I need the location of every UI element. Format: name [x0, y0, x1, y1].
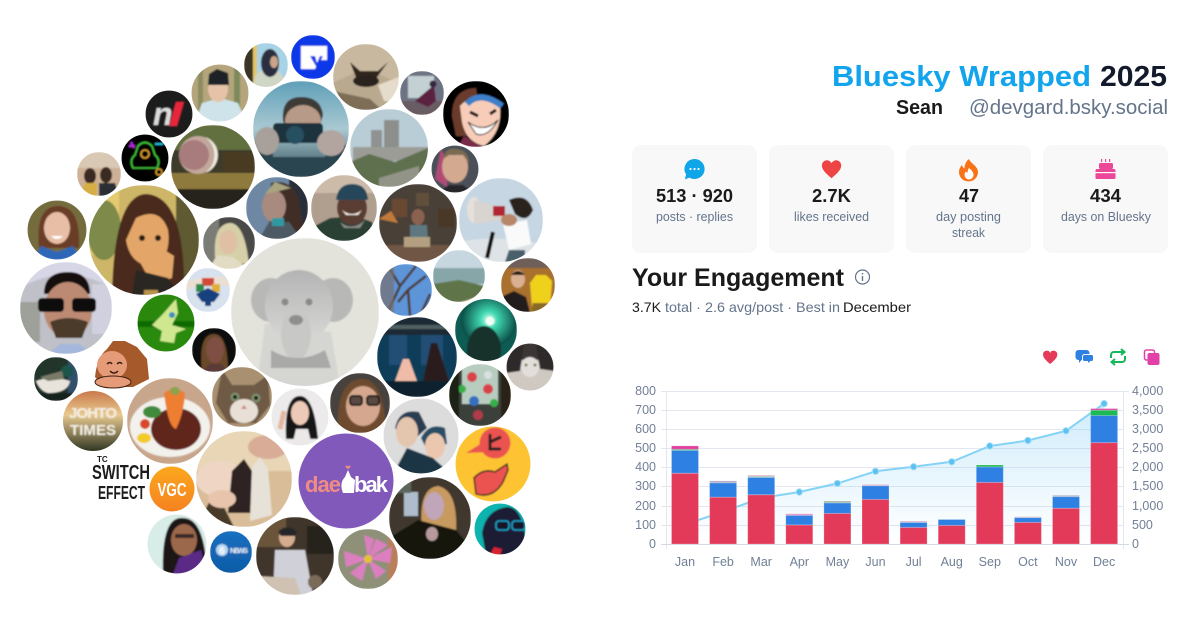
- month labels: Jun: [865, 555, 886, 569]
- avatar: dark blue period drama: [377, 317, 457, 397]
- legend: reposts: [1111, 349, 1125, 365]
- heading: Your Engagement: Your Engagement: [632, 264, 845, 292]
- avatar: daebak logo: [298, 434, 394, 528]
- avatar: nl logo: [145, 90, 193, 138]
- avatar: The Switch Effect: [92, 455, 150, 503]
- bar: May: [824, 501, 851, 544]
- cumulative line: [685, 404, 1104, 524]
- avatar: woman in room with paintings: [379, 184, 457, 262]
- avatar: man in hanbok: [191, 64, 249, 122]
- right axis labels: [1132, 384, 1163, 551]
- avatar: koala statue: [231, 238, 379, 392]
- avatar: moon bridge: [171, 125, 255, 209]
- stat card: day posting streak: streak: [952, 225, 985, 240]
- left axis labels: [635, 384, 656, 551]
- grid lines: [661, 391, 1129, 549]
- avatar: vox square logo: [291, 35, 335, 79]
- avatar: Celebi on green: [137, 294, 195, 352]
- title: Bluesky Wrapped: [832, 61, 1091, 93]
- right axis labels: 3,000: [1132, 422, 1163, 436]
- avatar: cartoon headband woman: [443, 81, 509, 147]
- avatar: woman adjusting glasses: [271, 388, 329, 446]
- month labels: Aug: [941, 555, 963, 569]
- avatar: smiling man in beanie: [311, 175, 377, 241]
- icon: cake: [1096, 159, 1116, 179]
- title: 2025: [1100, 61, 1167, 93]
- stat card: day posting streak: [906, 145, 1031, 253]
- stat card: days on Bluesky: [1043, 145, 1168, 253]
- avatar: umbrella street: [449, 364, 511, 426]
- month labels: Nov: [1055, 555, 1078, 569]
- right axis labels: 2,000: [1132, 460, 1163, 474]
- combo chart: monthly engagement: [635, 384, 1163, 569]
- engagement summary: [632, 299, 911, 315]
- avatar bubble cluster: [20, 35, 556, 595]
- avatar: castle: [350, 109, 433, 187]
- left axis labels: 400: [635, 460, 656, 474]
- bar: Jul: [900, 521, 927, 544]
- icon: chat bubble: [685, 159, 705, 179]
- stat card: likes received: likes received: [794, 209, 869, 224]
- avatar: 6 News: 6: [219, 546, 225, 557]
- avatar: Johto Times: JOHTO: [69, 405, 117, 422]
- left axis labels: 800: [635, 384, 656, 398]
- bar: Feb: [710, 481, 737, 544]
- stat card: posts and replies: posts · replies: [656, 209, 733, 224]
- month labels: Jan: [675, 555, 695, 569]
- avatar: Johto Times: [62, 390, 124, 452]
- avatar: carrot on hamburg plate: [127, 378, 213, 464]
- icon: flame: [959, 159, 978, 182]
- icon: heart: [822, 160, 841, 178]
- avatar: daebak logo: dae: [305, 472, 341, 497]
- bar: Jun: [862, 484, 889, 544]
- right axis labels: 1,000: [1132, 499, 1163, 513]
- stat card: posts and replies: [632, 145, 757, 253]
- month labels: Sep: [979, 555, 1001, 569]
- avatar: fluffy cat: [506, 344, 554, 390]
- avatar: gaming logo: [186, 268, 230, 312]
- engagement summary: 3.7K: [632, 299, 662, 315]
- avatar: pug on bed: [333, 44, 399, 110]
- right axis labels: 3,500: [1132, 403, 1163, 417]
- avatar: 6 News: NEWS: [230, 546, 248, 555]
- left axis labels: 700: [635, 403, 656, 417]
- avatar: blonde woman at bar: [389, 477, 471, 559]
- legend: replies: [1076, 350, 1094, 364]
- month labels: May: [826, 555, 850, 569]
- avatar: man with grey background: [431, 145, 479, 193]
- avatar: armored woman: [246, 177, 308, 239]
- avatar: girl on windowsill: [400, 71, 444, 115]
- avatar: woman by window: [244, 43, 288, 87]
- avatar: megaphone woman: [459, 178, 543, 262]
- engagement summary: total · 2.6 avg/post · Best in: [665, 299, 840, 315]
- left axis labels: 200: [635, 499, 656, 513]
- avatar: The Switch Effect: SWITCH: [92, 462, 150, 484]
- month labels: Dec: [1093, 555, 1115, 569]
- avatar: The Switch Effect: TC: [97, 455, 108, 464]
- avatar: woman in blue shirt: [27, 200, 87, 260]
- stat card: day posting streak: day posting: [936, 209, 1001, 224]
- bar: Sep: [976, 465, 1003, 544]
- stat card: day posting streak: 47: [959, 186, 979, 206]
- avatar: nl logo: n: [153, 96, 173, 132]
- left axis labels: 300: [635, 479, 656, 493]
- avatar: pink cosmos flower: [338, 529, 398, 589]
- stacked bars: [672, 409, 1118, 544]
- avatar: man with Pikachu: [501, 258, 555, 312]
- left axis labels: 500: [635, 441, 656, 455]
- avatar: yellow speech and hand logo: [455, 426, 531, 502]
- stat card: days on Bluesky: 434: [1090, 186, 1121, 206]
- right axis labels: 0: [1132, 537, 1139, 551]
- avatar: girl with glasses: [330, 373, 390, 433]
- avatar: anime woman: [87, 185, 199, 300]
- cumulative area: [685, 404, 1104, 544]
- avatar: 6 News: [210, 531, 252, 573]
- avatar: The Switch Effect: EFFECT: [98, 483, 145, 503]
- avatar: sunglasses man: [20, 262, 112, 354]
- month labels: Feb: [712, 555, 734, 569]
- stat card: likes received: [769, 145, 894, 253]
- stat card: posts and replies: 513 · 920: [656, 186, 733, 206]
- user handle: @devgard.bsky.social: [969, 97, 1168, 119]
- month labels: [675, 555, 1115, 569]
- avatar: blue-green light tunnel: [455, 299, 517, 361]
- avatar: tabby cat: [212, 367, 272, 427]
- month labels: Jul: [906, 555, 922, 569]
- avatar: VGC logo: [150, 466, 194, 512]
- bar: Mar: [748, 475, 775, 544]
- avatar: neon frog: [121, 134, 169, 182]
- month labels: Oct: [1018, 555, 1038, 569]
- avatar: trees and blue sky: [380, 264, 432, 316]
- avatar: dark-haired woman: [192, 328, 236, 372]
- left axis labels: 100: [635, 518, 656, 532]
- month labels: Mar: [750, 555, 772, 569]
- avatar: duck on water: [34, 357, 78, 401]
- bar: Apr: [786, 514, 813, 544]
- right axis labels: 2,500: [1132, 441, 1163, 455]
- bar: Nov: [1052, 495, 1080, 544]
- avatar: hedgehog cartoon: [95, 341, 149, 388]
- avatar: couple: [77, 152, 121, 196]
- stat card: likes received: 2.7K: [812, 186, 851, 206]
- icon: info: [856, 270, 870, 284]
- avatar: seaside landscape: [433, 250, 485, 302]
- bar: Jan: [672, 446, 698, 544]
- legend: quotes: [1144, 350, 1160, 365]
- avatar: white haired man: [203, 217, 255, 269]
- month labels: Apr: [790, 555, 809, 569]
- user name: Sean: [896, 97, 943, 119]
- right axis labels: 500: [1132, 518, 1153, 532]
- right axis labels: 1,500: [1132, 479, 1163, 493]
- line markers: [796, 400, 1107, 495]
- avatar: smiling woman with glasses: [147, 514, 207, 574]
- avatar: Johto Times: TIMES: [70, 422, 116, 439]
- right axis labels: 4,000: [1132, 384, 1163, 398]
- stat card: days on Bluesky: days on Bluesky: [1061, 209, 1151, 224]
- avatar: camera man: [253, 81, 349, 177]
- avatar: man reading: [256, 517, 334, 595]
- avatar: two men leaning: [383, 398, 459, 474]
- bar: Oct: [1014, 517, 1041, 544]
- legend: likes: [1043, 351, 1057, 364]
- avatar: cherry blossom couple: [196, 431, 292, 527]
- engagement summary: December: [843, 299, 911, 315]
- chart legend icons: [1043, 349, 1160, 365]
- avatar: VGC logo: VGC: [158, 480, 186, 500]
- left axis labels: 0: [649, 537, 656, 551]
- avatar: Darth Vader with glasses: [474, 503, 526, 555]
- bar: Dec: [1091, 409, 1118, 544]
- left axis labels: 600: [635, 422, 656, 436]
- bar: Aug: [938, 520, 965, 544]
- avatar: daebak logo: bak: [354, 472, 389, 497]
